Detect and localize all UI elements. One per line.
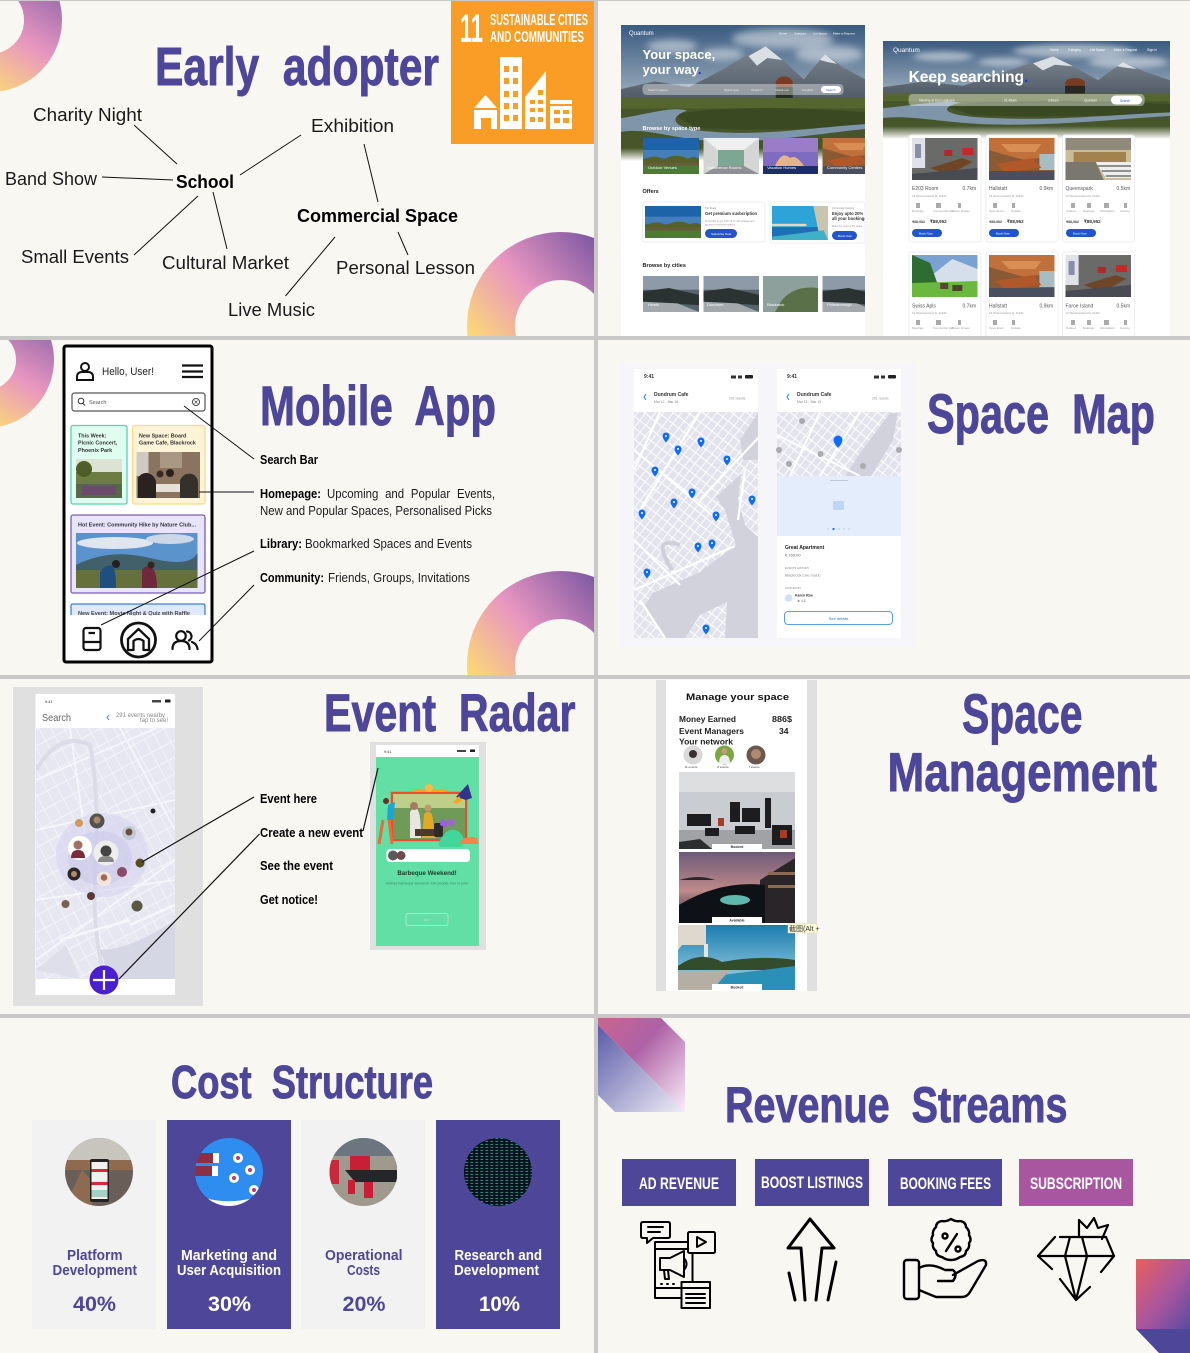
stats: Money Earned bbox=[679, 715, 736, 724]
result cards: Swiss Apls bbox=[912, 304, 936, 310]
mockup: search results page: Home bbox=[1050, 48, 1059, 52]
mockup: home page: Search bbox=[826, 88, 836, 92]
node: Cultural Market: Cultural Market bbox=[162, 252, 289, 273]
mockup: home page: all your bookings bbox=[832, 216, 867, 221]
card: hot event: Hot Event: Community Hike by Nature Club... bbox=[78, 522, 197, 528]
result cards: 0.7km bbox=[962, 186, 976, 192]
mockup: home page bbox=[621, 25, 878, 336]
phone: manage your space bbox=[656, 680, 820, 991]
tooltip: 截图(Alt + bbox=[789, 924, 820, 933]
label: search: Search bbox=[42, 712, 71, 724]
mockup: search results page: Quantum bbox=[893, 47, 920, 54]
result cards: Indoor Fitness bbox=[952, 209, 970, 213]
mockup: home page: Top Deals bbox=[705, 207, 717, 210]
result cards: Workstation bbox=[1100, 209, 1115, 213]
result cards: Outside bbox=[1011, 209, 1021, 213]
labels bbox=[260, 792, 364, 907]
screen: map with pins: 9:41 bbox=[644, 374, 654, 380]
box: boost listings: BOOST LISTINGS bbox=[761, 1173, 863, 1192]
node: Commercial Space: Commercial Space bbox=[297, 205, 458, 226]
photo: gym, booked bbox=[679, 772, 795, 849]
screen heading: Manage your space bbox=[686, 692, 789, 703]
title: Cost Structure: Cost Structure bbox=[171, 1056, 433, 1108]
decorative donut top left bbox=[0, 0, 43, 73]
mockup: home page: Blackrock bbox=[767, 302, 784, 307]
connector lines bbox=[102, 125, 408, 296]
result cards: 0.9km bbox=[1040, 304, 1053, 310]
result cards: Queenspark bbox=[1066, 186, 1093, 192]
icon: user bbox=[77, 363, 93, 380]
mockup: home page: your way. bbox=[642, 62, 702, 77]
screen: selected space detail: See details bbox=[829, 616, 848, 621]
box: boost listings bbox=[755, 1159, 869, 1206]
value: 20% bbox=[342, 1293, 386, 1316]
mockup: search results page: Keep searching. bbox=[909, 69, 1028, 86]
icon: diamond with crown bbox=[1038, 1218, 1114, 1300]
title: Space Management: Space bbox=[962, 682, 1082, 745]
network avatars bbox=[684, 746, 766, 769]
label bbox=[177, 1248, 281, 1279]
photo: code bbox=[464, 1138, 532, 1206]
result cards: E203 Room bbox=[912, 186, 938, 192]
panel: web mockups bbox=[621, 25, 1170, 342]
box: ad revenue: AD REVENUE bbox=[639, 1174, 719, 1193]
decorative shape top left bbox=[598, 1018, 685, 1112]
result cards: Book Now bbox=[996, 232, 1011, 236]
event blurb: Killiney barbeque weekend Join people, free to join! bbox=[386, 882, 468, 886]
box: booking fees bbox=[888, 1159, 1002, 1206]
label bbox=[52, 1248, 137, 1279]
screen: selected space detail: 291 results bbox=[872, 396, 889, 400]
mockup: home page: Make the most of the deals bbox=[832, 225, 863, 228]
event name: Barbeque Weekend! bbox=[397, 870, 457, 877]
label: Research and bbox=[454, 1248, 542, 1264]
result cards: Commercial Hall bbox=[933, 326, 954, 330]
mockup: search results page: Search bbox=[1120, 99, 1130, 103]
network avatars: 8 events bbox=[717, 765, 729, 769]
callout lines bbox=[119, 768, 378, 979]
decorative donut bottom right bbox=[467, 232, 594, 336]
mockup: home page: Search spaces bbox=[648, 88, 668, 92]
stats: 34 bbox=[779, 727, 789, 736]
result cards: Meetings bbox=[1083, 209, 1095, 213]
screen: selected space detail: Dundrum Cafe bbox=[797, 392, 832, 398]
box: ad revenue bbox=[622, 1159, 736, 1206]
screen: map with pins: 291 results bbox=[729, 396, 746, 400]
result cards: ₹88,952 bbox=[930, 219, 947, 224]
label: Platform bbox=[67, 1248, 122, 1264]
screen: selected space detail bbox=[776, 369, 902, 638]
result cards: Meetings bbox=[912, 326, 924, 330]
node: School: School bbox=[176, 171, 234, 192]
card: new space: Game Cafe, Blackrock bbox=[139, 440, 196, 446]
mockup: home page: Home bbox=[779, 32, 787, 36]
title: Event Radar: Event Radar bbox=[324, 684, 576, 743]
label bbox=[454, 1248, 542, 1279]
callout lines bbox=[101, 406, 254, 641]
screen: selected space detail: EVENTS HISTORY bbox=[785, 566, 809, 570]
mockup: search results page bbox=[883, 41, 1170, 342]
label: Development bbox=[454, 1263, 539, 1279]
card: new space bbox=[132, 426, 205, 504]
screen: selected space detail: HOSTED BY bbox=[785, 586, 801, 590]
mockup: home page: Subscribe Now bbox=[711, 232, 732, 236]
badge: SDG 11 sustainable cities bbox=[451, 1, 594, 144]
feature: library: Library: bbox=[260, 537, 302, 551]
result cards: Meetings bbox=[912, 209, 924, 213]
mockup: home page: Dundrum bbox=[707, 302, 724, 307]
label: Development bbox=[52, 1263, 137, 1279]
label: nearby events bbox=[116, 712, 168, 724]
result cards: Hallstatt bbox=[989, 304, 1008, 310]
label: Operational bbox=[325, 1248, 402, 1264]
title: Early adopter: Early adopter bbox=[155, 37, 439, 97]
badge: SDG 11 sustainable cities: AND COMMUNITIES bbox=[490, 29, 584, 46]
label: nearby events: tap to see! bbox=[140, 717, 168, 724]
result cards: Book Now bbox=[1073, 232, 1088, 236]
label: create a new event: Create a new event bbox=[260, 826, 364, 840]
value: 30% bbox=[208, 1293, 251, 1316]
card: this week: This Week: bbox=[78, 434, 107, 440]
screen: selected space detail: Blackrock Live music bbox=[785, 574, 821, 578]
attendee pill bbox=[386, 849, 470, 862]
icon: menu bbox=[182, 366, 203, 377]
greeting: Hello, User! bbox=[102, 366, 154, 378]
card: hot event bbox=[71, 515, 205, 593]
mockup: home page: Phibsborough bbox=[827, 302, 852, 307]
mockup: home page: Book Now bbox=[838, 234, 853, 238]
mockup: home page: Get premium susbcription bbox=[705, 211, 758, 216]
title: Revenue Streams: Revenue Streams bbox=[725, 1077, 1068, 1133]
feature: homepage bbox=[260, 487, 495, 518]
join button bbox=[406, 914, 448, 926]
panel: cost structure bbox=[32, 1056, 560, 1329]
box: subscription: SUBSCRIPTION bbox=[1030, 1174, 1122, 1193]
panel: mobile app bbox=[0, 340, 594, 675]
value: 40% bbox=[73, 1293, 116, 1316]
result cards: 0.5km bbox=[1116, 186, 1130, 192]
feature: homepage: New and Popular Spaces, Personalised Picks bbox=[260, 504, 492, 518]
result cards: Open Event bbox=[989, 209, 1004, 213]
result cards: ₹88,952 bbox=[1007, 219, 1024, 224]
node: Personal Lesson: Personal Lesson bbox=[336, 257, 475, 278]
icon: home bbox=[122, 623, 156, 657]
label: get notice: Get notice! bbox=[260, 893, 318, 907]
mockup: home page: access to exclusive spaces bbox=[705, 224, 736, 226]
stats: 886$ bbox=[772, 715, 793, 724]
mockup: home page: Vacation Homes bbox=[767, 165, 796, 170]
feature list bbox=[260, 453, 495, 585]
phone wireframe bbox=[64, 346, 212, 662]
result cards: Gaming bbox=[1120, 209, 1130, 213]
feature: community bbox=[260, 571, 470, 585]
result cards: ₹88,952 bbox=[912, 220, 925, 224]
mockup: home page: Check in bbox=[751, 88, 763, 92]
result cards: Hallstatt bbox=[989, 186, 1008, 192]
label: Costs bbox=[347, 1262, 380, 1279]
decorative shape bottom right bbox=[1136, 1259, 1190, 1353]
event detail screen bbox=[370, 742, 486, 950]
node: Charity Night: Charity Night bbox=[33, 104, 142, 125]
feature: community: Community: bbox=[260, 571, 324, 585]
card: operational costs bbox=[326, 1138, 402, 1311]
search bar: Search bbox=[89, 400, 106, 406]
search bar bbox=[72, 393, 205, 411]
feature: library: Bookmarked Spaces and Events bbox=[305, 537, 472, 551]
event illustration bbox=[379, 784, 479, 847]
decorative donut bottom right bbox=[467, 571, 594, 675]
mockup: home page: Browse by cities bbox=[642, 263, 686, 269]
panel: space management bbox=[656, 680, 1157, 991]
screen: map with pins bbox=[634, 369, 758, 638]
result cards: 0.5km bbox=[1116, 304, 1130, 310]
result cards: 0.7km bbox=[962, 304, 976, 310]
screen: selected space detail: Mar 12 - Mar 15 bbox=[797, 400, 821, 404]
mockup: search results page: Meeting at Dun Laighaire bbox=[919, 98, 955, 102]
result cards: Workstation bbox=[1100, 326, 1115, 330]
mockup: search results page: Make a Request bbox=[1114, 48, 1137, 52]
mockup: home page: Space type bbox=[724, 88, 739, 92]
panel: early adopter bbox=[0, 1, 594, 336]
stats: Your network bbox=[679, 738, 734, 746]
map screens bbox=[634, 369, 902, 638]
node: Live Music: Live Music bbox=[228, 299, 315, 320]
node: Band Show: Band Show bbox=[5, 168, 98, 189]
mockup: home page: Browse by space type bbox=[642, 126, 700, 132]
mockup: home page: Outdoor Venues bbox=[648, 165, 677, 170]
card: research and development bbox=[436, 1120, 560, 1329]
panel: event radar bbox=[13, 684, 576, 1006]
icon: percent badge in hand bbox=[904, 1219, 986, 1299]
panel: revenue streams bbox=[598, 1018, 1190, 1353]
screen: map with pins: Mar 12 - Mar 15 bbox=[654, 400, 678, 404]
mockup: search results page: Quantum bbox=[1084, 98, 1097, 102]
feature: homepage: Upcoming and Popular Events, bbox=[327, 487, 495, 501]
result cards: Outdoor bbox=[1066, 209, 1076, 213]
badge: SDG 11 sustainable cities: SUSTAINABLE CITIES bbox=[490, 12, 588, 29]
screen: map with pins: Dundrum Cafe bbox=[654, 392, 689, 398]
result cards: Meetings bbox=[1083, 326, 1095, 330]
photo: infinity pool, booked bbox=[678, 925, 795, 990]
feature: search bar: Search Bar bbox=[260, 453, 318, 467]
mockup: home page: Offers bbox=[642, 189, 659, 195]
result cards: Commercial Hall bbox=[933, 209, 954, 213]
icon: community bbox=[172, 631, 198, 649]
screen: selected space detail: Great Apartment bbox=[785, 545, 825, 551]
event detail screen: 9:41 bbox=[384, 750, 391, 754]
card: new event, cropped: New Event: Movie Night & Quiz with Raffle bbox=[78, 611, 190, 617]
result cards: ₹88,952 bbox=[1066, 220, 1079, 224]
feature: homepage: Homepage: bbox=[260, 487, 321, 501]
add event button bbox=[90, 966, 118, 994]
icon: library bbox=[84, 628, 100, 650]
panel: space map bbox=[619, 363, 1155, 647]
badge: SDG 11 sustainable cities: 11 bbox=[460, 7, 483, 51]
card: new event, cropped bbox=[66, 604, 210, 620]
photo: gym, booked: Booked bbox=[731, 845, 743, 849]
mockup: home page: Conference Rooms bbox=[707, 165, 741, 170]
avatars bbox=[62, 808, 156, 912]
mockup: search results page: Sign in bbox=[1147, 48, 1157, 52]
mockup: home page: Your space, bbox=[642, 47, 715, 62]
mockup: home page: Location bbox=[802, 88, 814, 92]
mockup: home page: Community Centers bbox=[827, 165, 862, 170]
result cards: 13 Westmoreland St, Dublin bbox=[989, 311, 1024, 315]
label: Marketing and bbox=[181, 1248, 277, 1264]
mockup: home page: Make a Request bbox=[833, 32, 855, 36]
photo: resort at dusk, available: Available bbox=[729, 918, 745, 922]
mind map bbox=[5, 104, 475, 320]
result cards: Open Event bbox=[989, 326, 1004, 330]
result cards: Outdoor bbox=[1066, 326, 1076, 330]
result cards: Indoor Fitness bbox=[952, 326, 970, 330]
title: Space Management bbox=[888, 682, 1157, 803]
icon: boost arrow bbox=[788, 1219, 836, 1300]
box: subscription bbox=[1019, 1159, 1133, 1206]
card: new space: New Space: Board bbox=[139, 434, 186, 440]
card: this week: Picnic Concert, bbox=[78, 440, 118, 446]
result cards: ₹88,952 bbox=[1084, 219, 1101, 224]
result cards: Gaming bbox=[1120, 326, 1130, 330]
photo: resort at dusk, available bbox=[679, 852, 795, 923]
mockup: search results page: Category bbox=[1068, 48, 1081, 52]
label bbox=[325, 1248, 402, 1279]
stats: Event Managers bbox=[679, 727, 745, 736]
mockup: search results page: 3:50am bbox=[1048, 98, 1059, 102]
result cards: 13 Westmoreland St, Dublin bbox=[912, 311, 947, 315]
mockup: home page: Subscribe to get 10% off on all bookings and bbox=[705, 220, 755, 223]
label: User Acquisition bbox=[177, 1263, 281, 1279]
label: nearby events: 291 events nearby bbox=[116, 712, 166, 719]
result cards: ₹88,952 bbox=[989, 220, 1002, 224]
mockup: home page: List Space bbox=[813, 32, 827, 36]
screen: selected space detail: ★ 4.8 bbox=[797, 599, 806, 603]
node: Exhibition: Exhibition bbox=[311, 115, 394, 136]
result cards: Book Now bbox=[919, 232, 934, 236]
stats bbox=[679, 715, 793, 746]
card: this week: Phoenix Park bbox=[78, 448, 112, 454]
mockup: search results page: 01:45am bbox=[1004, 98, 1017, 102]
card: this week bbox=[71, 426, 127, 504]
screen: selected space detail: € 150,00 bbox=[785, 552, 801, 558]
radar map bbox=[36, 720, 175, 979]
result cards: 13 Westmoreland St, Dublin bbox=[1066, 194, 1101, 198]
result cards bbox=[909, 135, 1134, 342]
network avatars: 11 events bbox=[685, 765, 698, 769]
result cards: Outside bbox=[1011, 326, 1021, 330]
photo: phone in hand bbox=[65, 1138, 133, 1206]
icon: advertising bbox=[641, 1222, 715, 1308]
mockup: home page: Check out bbox=[775, 88, 789, 92]
join button: Join ! bbox=[423, 918, 431, 922]
radar screen: 9:41 bbox=[45, 700, 52, 704]
feature: community: Friends, Groups, Invitations bbox=[328, 571, 470, 585]
mockup: home page: Category bbox=[794, 32, 807, 36]
card: marketing and user acquisition bbox=[167, 1120, 291, 1329]
network avatars: 7 events bbox=[748, 765, 760, 769]
mockup: search results page: List Space bbox=[1090, 48, 1105, 52]
result cards: Faroe Island bbox=[1066, 304, 1094, 310]
mockup: home page: Howth bbox=[648, 302, 659, 307]
title: Mobile App: Mobile App bbox=[260, 374, 496, 437]
decorative donut top left bbox=[0, 311, 35, 409]
map pins bbox=[638, 433, 756, 634]
label: event here: Event here bbox=[260, 792, 317, 806]
mockup: home page: Enjoy upto 20% bbox=[832, 211, 863, 216]
result cards: 13 Westmoreland St, Dublin bbox=[989, 194, 1024, 198]
mockup: home page: Quantum bbox=[629, 31, 654, 37]
photo: infinity pool, booked: Booked bbox=[731, 986, 743, 990]
result cards: 13 Westmoreland St, Dublin bbox=[912, 194, 947, 198]
screen: selected space detail: 9:41 bbox=[787, 374, 797, 380]
illustration: magnet bbox=[195, 1138, 263, 1206]
screen: selected space detail: Karen Roe bbox=[795, 594, 813, 598]
result cards: 13 Westmoreland St, Dublin bbox=[1066, 311, 1101, 315]
value: 10% bbox=[479, 1293, 520, 1316]
photo: office bbox=[329, 1138, 397, 1206]
box: booking fees: BOOKING FEES bbox=[900, 1174, 991, 1193]
card: platform development bbox=[53, 1138, 137, 1311]
result cards: 0.9km bbox=[1040, 186, 1053, 192]
radar screen bbox=[13, 687, 203, 1006]
mockup: home page: Community Centers bbox=[832, 207, 855, 210]
node: Small Events: Small Events bbox=[21, 246, 129, 267]
label: see the event: See the event bbox=[260, 859, 334, 873]
